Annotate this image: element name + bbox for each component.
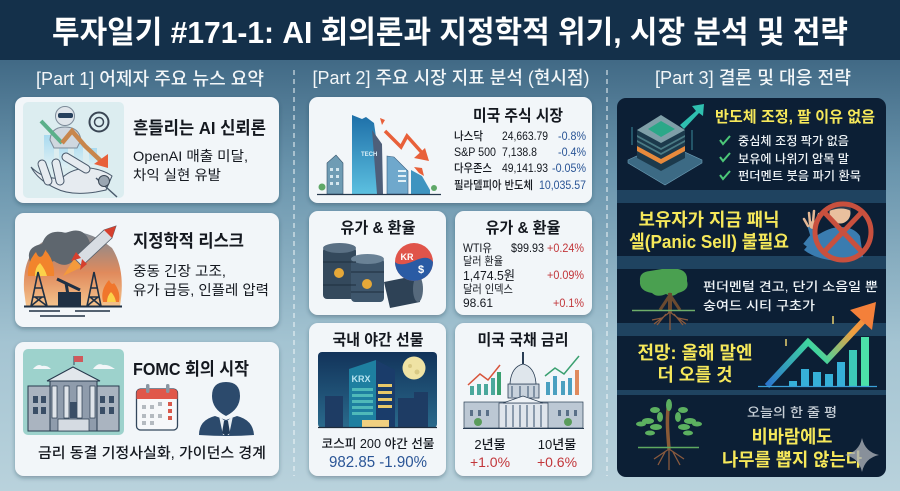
icon: silhouette of person [199, 382, 254, 436]
one-line verdict: 비바람에도 [752, 427, 832, 447]
panel: AI trust news card [15, 97, 279, 203]
fx table: 98.61 [463, 296, 493, 310]
stock table: 필라델피아 반도체 [454, 179, 533, 192]
card heading: 국내 야간 선물 [332, 331, 424, 349]
panel: oil and fx illustration [309, 211, 446, 315]
panic sell message: 셀(Panic Sell) 불필요 [629, 232, 789, 252]
card text [133, 263, 269, 298]
icon: federal reserve building [23, 349, 124, 435]
card heading: 미국 주식 시장 [473, 107, 563, 125]
stock table: -0.05% [552, 163, 586, 175]
futures label: 코스피 200 야간 선물 [322, 437, 434, 451]
icon: young tree [636, 399, 702, 470]
subheading: 반도체 조정, 팔 이유 없음 [715, 108, 875, 126]
heading: part 3: [Part 3] 결론 및 대응 전략 [655, 68, 851, 88]
card text: 유가 급등, 인플레 압력 [133, 282, 269, 298]
fx table: $99.93 [511, 243, 544, 255]
panic sell message [629, 210, 789, 252]
title banner: 투자일기 #171-1: AI 회의론과 지정학적 위기, 시장 분석 및 전략 [52, 15, 848, 50]
card text: 중동 긴장 고조, [133, 263, 226, 279]
panel: FOMC card [15, 342, 279, 476]
stock table: S&P 500 [454, 147, 496, 159]
stock table [454, 130, 586, 192]
fx table: +0.24% [547, 243, 584, 255]
card text [133, 148, 248, 183]
icon: oil barrels [323, 243, 423, 308]
fx table [463, 242, 584, 310]
icon: robot hand with falling chart [23, 102, 124, 198]
outlook message: 전망: 올해 말엔 [638, 343, 752, 363]
icon: collapsing towers [317, 115, 441, 194]
outlook message [638, 343, 752, 385]
title banner [0, 0, 900, 60]
icon: KR dollar coin [395, 243, 433, 281]
fx table: 1,474.5원 [463, 268, 515, 283]
card heading: 유가 & 환율 [340, 219, 416, 237]
heading: part 2: [Part 2] 주요 시장 지표 분석 (현시점) [312, 68, 590, 88]
futures value: 982.85 -1.90% [329, 454, 427, 471]
fx table: +0.1% [553, 298, 584, 310]
panel: oil and fx figures [455, 211, 592, 315]
panel: geopolitical risk card [15, 213, 279, 327]
icon: KR dollar coin: KR [400, 252, 414, 262]
fx table: 달러 환율 [463, 254, 503, 268]
stock table: 24,663.79 [502, 131, 548, 143]
stock table: -0.4% [558, 147, 586, 159]
yield: 2 year: +1.0% [470, 454, 510, 470]
panic sell message: 보유자가 지금 패닉 [638, 210, 780, 230]
icon: collapsing towers: TECH [361, 152, 377, 158]
icon: semiconductor chip [628, 104, 704, 185]
panel: Korean overnight futures [309, 323, 446, 476]
card heading: 미국 국채 금리 [478, 331, 568, 349]
yield: 2 year: 2년물 [474, 437, 506, 452]
stock table: -0.8% [558, 131, 586, 143]
card text: 금리 동결 기정사실화, 가이던스 경계 [38, 445, 266, 462]
card text: OpenAI 매출 미달, [133, 148, 248, 164]
checklist: 중심체 조정 팍가 없음 [738, 134, 849, 148]
icon: KRX building at night: KRX [351, 374, 371, 384]
fx table: 달러 인덱스 [463, 282, 513, 296]
card heading: 지정학적 리스크 [133, 231, 244, 251]
fundamentals text [703, 280, 878, 313]
panel: US stock market [309, 97, 592, 203]
icon: sparkle [845, 438, 879, 472]
outlook message: 더 오를 것 [658, 365, 732, 385]
icon: person with prohibition sign [804, 200, 871, 261]
icon: KR dollar coin: $ [418, 264, 424, 276]
one-line verdict [722, 405, 862, 470]
icon: rising arrow chart [758, 302, 877, 386]
yield: 10 year: 10년물 [538, 437, 576, 452]
one-line verdict: 나무를 뽑지 않는다 [722, 450, 862, 470]
yield: 2 year [470, 437, 510, 470]
yield: 10 year: +0.6% [537, 454, 577, 470]
stock table: 10,035.57 [539, 180, 586, 192]
checklist: 보유에 나위기 암목 말 [738, 152, 849, 166]
card text: 차익 실현 유발 [133, 167, 221, 183]
card heading: 유가 & 환율 [486, 219, 560, 237]
stock table: 나스닥 [454, 130, 483, 143]
panel: conclusion and strategy [617, 98, 886, 477]
card heading: FOMC 회의 시작 [133, 359, 249, 379]
icon: KRX building at night [318, 352, 437, 428]
panel: US treasury yields [455, 323, 592, 476]
stock table: 7,138.8 [502, 147, 537, 159]
fx table: +0.09% [547, 270, 584, 282]
checklist [720, 134, 861, 183]
stock table: 다우존스 [454, 162, 492, 175]
card heading: 흔들리는 AI 신뢰론 [133, 118, 266, 138]
fx table: WTI유 [463, 242, 492, 255]
stock table: 49,141.93 [502, 163, 548, 175]
fundamentals text: 숭여드 시티 구초가 [703, 299, 816, 313]
fundamentals text: 펀더멘털 견고, 단기 소음일 뿐 [703, 280, 878, 294]
checklist: 펀더멘트 붓음 파기 환묵 [738, 169, 861, 183]
icon: calendar [136, 384, 178, 430]
icon: tree with roots [632, 269, 695, 330]
one-line verdict: 오늘의 한 줄 평 [747, 405, 837, 420]
icon: oil field fire and rocket [24, 226, 122, 316]
yield: 10 year [537, 437, 577, 470]
icon: capitol and charts [463, 352, 584, 428]
heading: part 1: [Part 1] 어제자 주요 뉴스 요약 [36, 69, 264, 89]
